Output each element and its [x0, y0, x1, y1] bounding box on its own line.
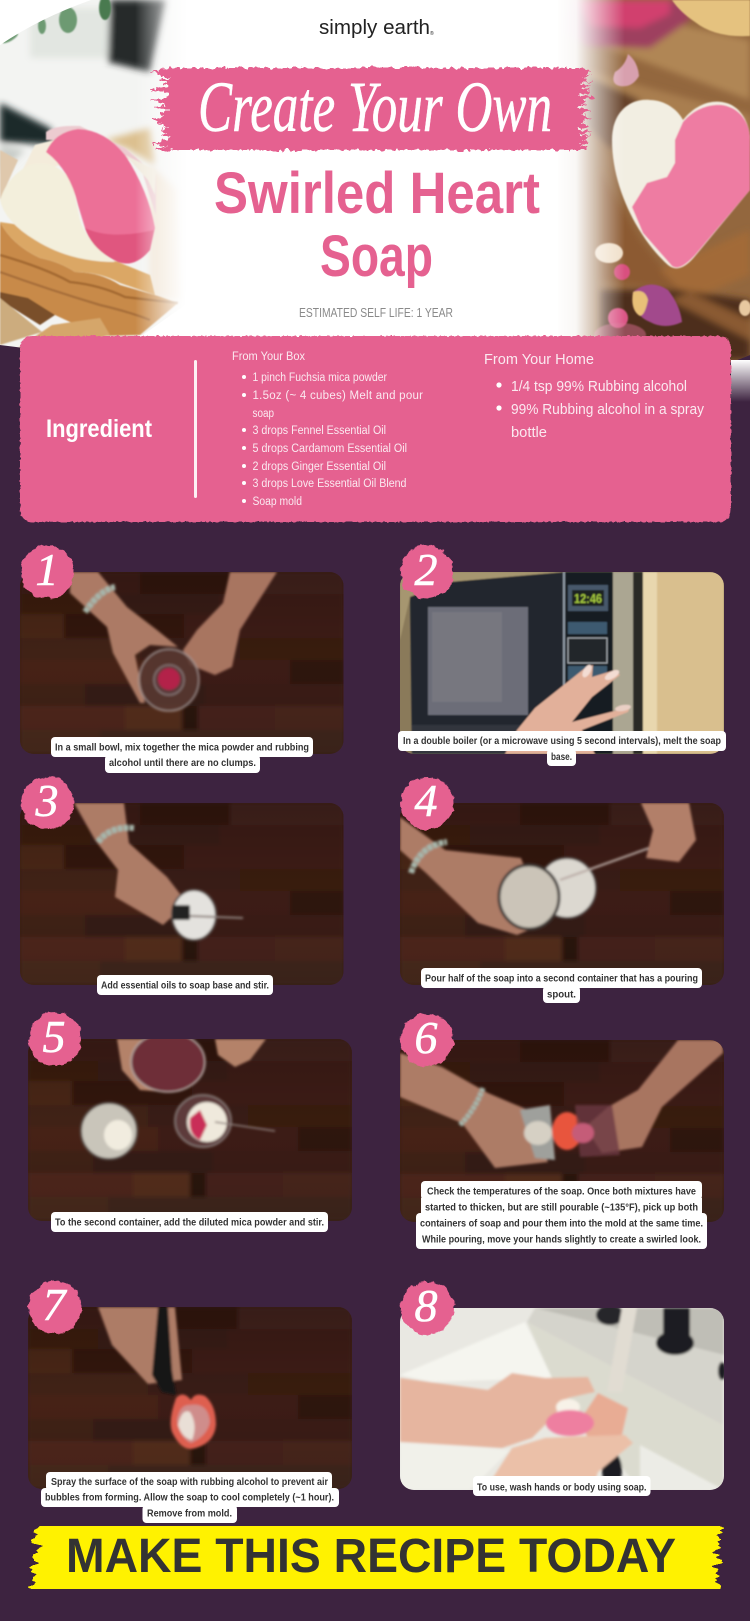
caption	[51, 1212, 328, 1232]
badge: 4: 4	[414, 775, 438, 826]
list: from your box: From Your Box	[232, 351, 305, 363]
caption	[473, 1476, 650, 1496]
photo: microwave	[400, 572, 724, 754]
badge: 7	[28, 1279, 82, 1334]
photo: adding essential oil	[20, 803, 344, 985]
fade: left photo to white	[135, 0, 205, 345]
list: from your box: 5 drops Cardamom Essential Oil	[252, 443, 407, 455]
caption: Check the temperatures of the soap. Once both mixtures have	[427, 1186, 696, 1198]
call to action banner: MAKE THIS RECIPE TODAY	[66, 1530, 676, 1583]
badge: 1: 1	[36, 544, 58, 595]
badge: 8	[400, 1280, 454, 1334]
caption: To the second container, add the diluted mica powder and stir.	[55, 1216, 324, 1228]
caption: base.	[551, 751, 572, 763]
badge: 6: 6	[414, 1012, 438, 1063]
caption: started to thicken, but are still pourable (~135°F), pick up both	[425, 1202, 698, 1214]
caption: Pour half of the soap into a second container that has a pouring	[425, 972, 698, 984]
right edge white fade into purple	[731, 360, 750, 402]
step 2 panel	[398, 544, 726, 766]
photo: heart soap on wood with petals (right)	[555, 0, 750, 365]
header white area	[0, 0, 750, 345]
photo: soap on wooden dish (left)	[0, 0, 178, 348]
list: from your box: 3 drops Fennel Essential Oil	[252, 425, 386, 437]
badge: 4	[400, 775, 454, 830]
caption	[97, 975, 273, 995]
caption: Remove from mold.	[147, 1508, 232, 1520]
caption	[421, 968, 702, 1003]
caption	[41, 1472, 339, 1523]
fade: right photo to white	[555, 0, 625, 345]
caption: Spray the surface of the soap with rubbing alcohol to prevent air	[51, 1476, 328, 1488]
title: Create Your Own: Create Your Own	[198, 67, 552, 147]
caption	[416, 1181, 707, 1249]
step 3 panel	[20, 775, 344, 995]
badge: 8: 8	[414, 1280, 438, 1331]
badge: 3: 3	[34, 775, 58, 826]
photo: adding mica to second container	[28, 1032, 352, 1221]
title brush background	[160, 68, 586, 150]
caption	[51, 737, 313, 773]
step 7 panel	[28, 1279, 352, 1523]
photo: pouring into mold	[400, 1040, 724, 1222]
step 8 panel	[400, 1280, 726, 1496]
list: from your box: 2 drops Ginger Essential Oil	[252, 461, 386, 473]
brand logo: simply earth	[319, 17, 430, 39]
photo: microwave: 12:46	[574, 591, 602, 606]
caption: While pouring, move your hands slightly to create a swirled look.	[422, 1234, 701, 1246]
badge: 5	[28, 1011, 82, 1066]
heading: Swirled Heart Soap: Swirled Heart	[214, 161, 540, 226]
list: from your home: bottle	[511, 424, 547, 441]
badge: 2: 2	[414, 544, 438, 595]
shelf life note: ESTIMATED SELF LIFE: 1 YEAR	[299, 305, 453, 320]
list: from your box: soap	[252, 408, 274, 420]
badge: 1	[21, 544, 74, 598]
caption: In a small bowl, mix together the mica powder and rubbing	[55, 742, 309, 754]
caption: containers of soap and pour them into the mold at the same time.	[420, 1218, 703, 1230]
caption: bubbles from forming. Allow the soap to cool completely (~1 hour).	[45, 1492, 334, 1504]
list: from your box: 1.5oz (~ 4 cubes) Melt and pour	[252, 390, 423, 402]
badge: 7: 7	[42, 1279, 68, 1330]
list: from your box: Soap mold	[252, 496, 302, 508]
heading: Swirled Heart Soap: Soap	[320, 224, 433, 289]
heading: Swirled Heart Soap	[214, 161, 540, 289]
list: from your home	[484, 351, 704, 441]
photo: spraying soap	[28, 1307, 352, 1489]
heading: Ingredient: Ingredient	[46, 415, 153, 443]
badge: 2	[400, 544, 454, 598]
list: from your home: 99% Rubbing alcohol in a spray	[511, 401, 704, 418]
step 6 panel	[400, 1012, 724, 1249]
list: from your box: 3 drops Love Essential Oil Blend	[252, 478, 406, 490]
step 4 panel	[400, 775, 724, 1003]
caption: To use, wash hands or body using soap.	[477, 1482, 647, 1494]
divider	[194, 360, 197, 498]
badge: 3	[21, 775, 74, 830]
photo: washing hands with soap	[400, 1305, 726, 1490]
photo: pouring soap	[400, 803, 724, 985]
badge: 5: 5	[42, 1011, 66, 1062]
list: from your box	[232, 351, 423, 508]
step 1 panel	[20, 544, 344, 773]
photo: mixing mica in bowl	[20, 572, 344, 754]
step 5 panel	[28, 1011, 352, 1232]
badge: 6	[400, 1012, 454, 1066]
panel: ingredients	[20, 336, 731, 522]
caption	[398, 731, 726, 766]
list: from your home: From Your Home	[484, 351, 594, 368]
caption: spout.	[547, 988, 576, 1000]
caption: alcohol until there are no clumps.	[109, 757, 256, 769]
caption: Add essential oils to soap base and stir.	[101, 980, 269, 992]
list: from your home: 1/4 tsp 99% Rubbing alcohol	[511, 378, 687, 395]
list: from your box: 1 pinch Fuchsia mica powder	[252, 372, 387, 384]
brand logo: ®	[430, 30, 434, 37]
